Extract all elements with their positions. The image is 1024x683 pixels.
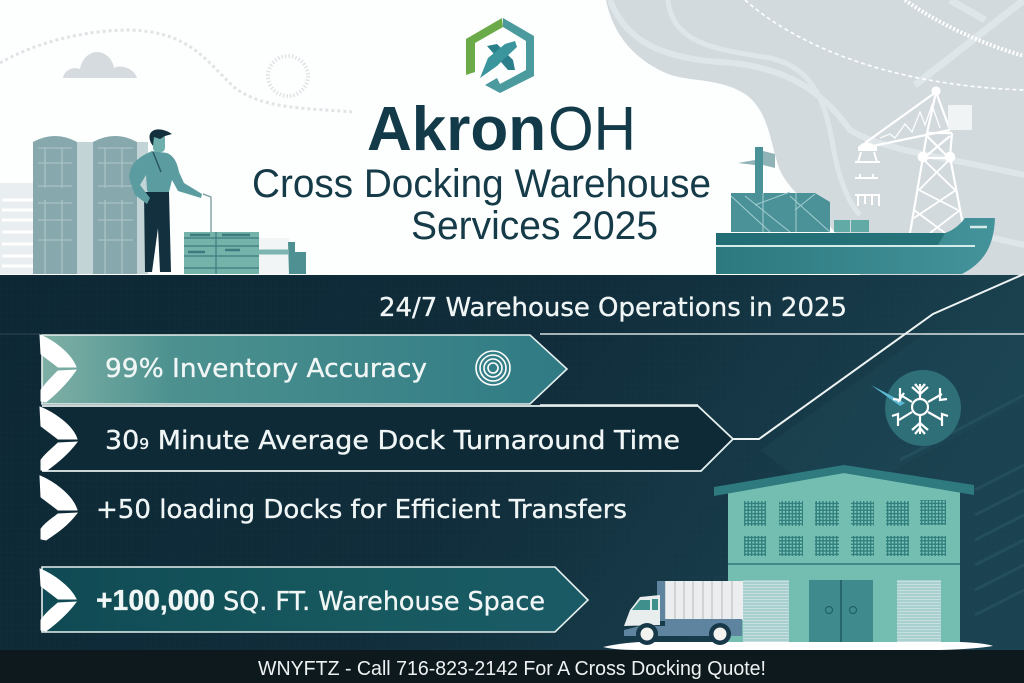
illustration: harbor crane (855, 88, 972, 233)
title: Cross Docking Warehouse: Cross Docking Warehouse (252, 162, 711, 206)
panel: loading docks (40, 476, 627, 540)
illustration: cargo ship (716, 147, 995, 274)
panel: dock turnaround time (40, 406, 733, 471)
doors (743, 580, 941, 642)
illustration: stacked crates (184, 232, 306, 274)
title: Akron OH: Akron (367, 95, 546, 164)
illustration: warehouse building (714, 465, 974, 642)
dotted decorative route (0, 30, 352, 112)
illustration: delivery truck (624, 581, 743, 645)
icon: concentric rings (476, 351, 510, 385)
heading: 24/7 operations: 24/7 Warehouse Operations in 2025 (379, 293, 847, 323)
illustration: city buildings (0, 136, 148, 274)
logo: hexagon plane (466, 18, 534, 93)
title: Services 2025: Services 2025 (411, 204, 658, 248)
icon: left chevron 4 (40, 569, 76, 631)
icon: left chevron 1 (40, 335, 76, 402)
connector lines (0, 274, 1024, 439)
footer bar (0, 650, 1024, 683)
label: 30 minute turnaround: 309 Minute Average Dock Turnaround Time (105, 426, 680, 456)
icon: left chevron 2 (40, 407, 77, 471)
white header background (0, 0, 1024, 276)
panel: warehouse space (40, 567, 588, 632)
grey map backdrop (606, 0, 1024, 275)
icon: snowflake badge (871, 370, 961, 446)
ground strip (603, 642, 993, 650)
panel: inventory accuracy (40, 335, 567, 404)
windows (744, 500, 946, 556)
footer text: WNYFTZ - Call 716-823-2142 For A Cross Docking Quote! (258, 658, 766, 680)
label: warehouse space: +100,000 SQ. FT. Warehouse Space (96, 585, 545, 617)
title: OH: OH (548, 95, 636, 164)
label: loading docks: +50 loading Docks for Efficient Transfers (96, 495, 627, 525)
icon: left chevron 3 (40, 476, 77, 540)
illustration: warehouse worker (129, 129, 211, 272)
dark lower panel (0, 275, 1024, 651)
icon: cloud (63, 52, 137, 78)
label: 99% inventory accuracy: 99% Inventory Accuracy (105, 354, 427, 384)
